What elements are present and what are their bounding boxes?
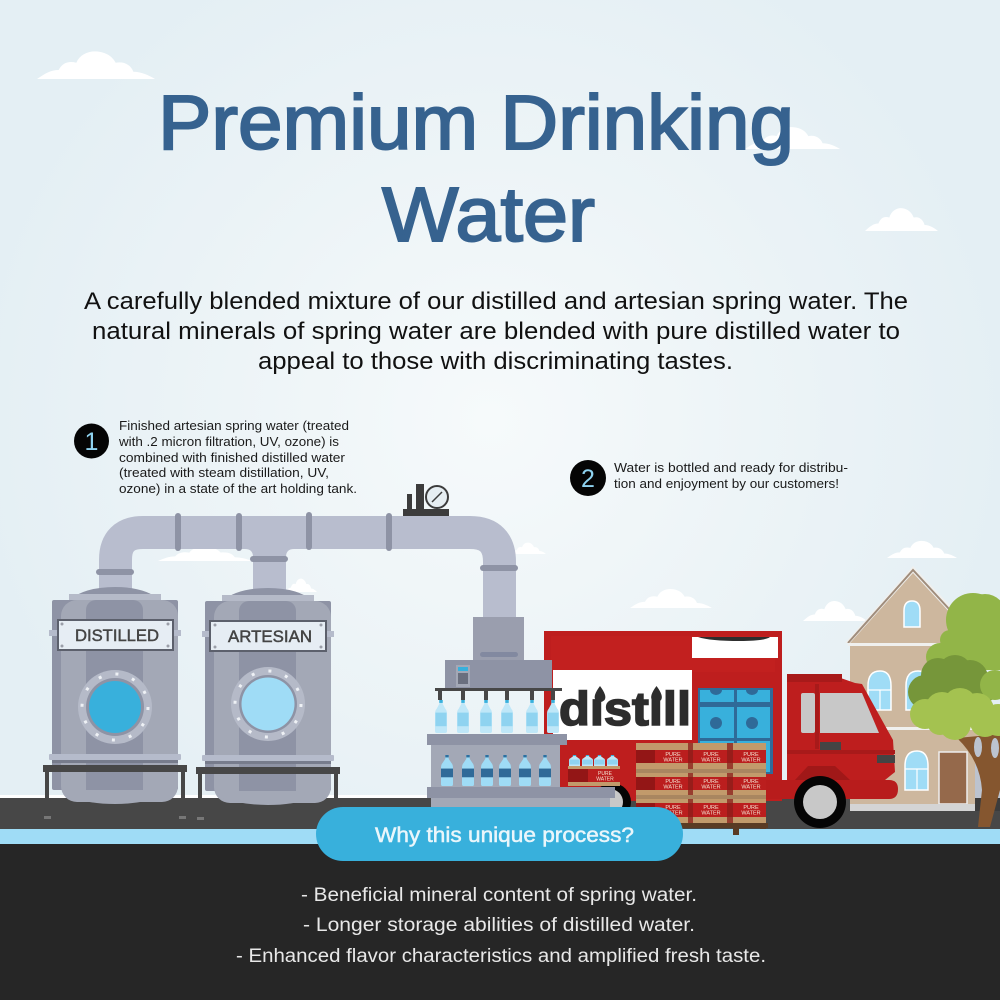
step 1 text: Finished artesian spring water (treated	[119, 419, 349, 433]
porthole	[78, 670, 152, 744]
crate labels: WATER	[701, 784, 721, 790]
window top	[904, 601, 920, 627]
crate labels: WATER	[701, 810, 721, 816]
label: DISTILLED	[75, 626, 159, 645]
button: why this unique process: Why this unique process?	[375, 824, 634, 847]
crate labels: WATER	[741, 810, 761, 816]
clouds	[37, 51, 957, 621]
crate labels: PURE	[665, 805, 681, 811]
step 1 text: combined with finished distilled water	[119, 451, 345, 465]
label: ARTESIAN	[228, 627, 312, 646]
label	[49, 619, 181, 651]
cargo rack of water jugs	[698, 688, 773, 774]
crate labels: PURE	[743, 779, 759, 785]
pressure gauge	[403, 484, 449, 516]
small crate with bottles: WATER	[596, 776, 614, 782]
window lower	[905, 751, 928, 790]
intro text	[84, 288, 908, 375]
step 2 text: tion and enjoyment by our customers!	[614, 477, 839, 491]
house	[845, 566, 1000, 811]
cab windows	[801, 693, 815, 733]
upper white sign	[692, 637, 778, 658]
front wheel	[794, 776, 846, 828]
crate labels: PURE	[743, 805, 759, 811]
step 1 text	[118, 419, 357, 496]
step 1 badge: 1	[85, 428, 98, 456]
tree	[908, 593, 1000, 827]
crate labels: PURE	[703, 779, 719, 785]
crate labels	[663, 752, 761, 816]
step 1 badge	[74, 424, 109, 458]
small crate with bottles: PURE	[598, 771, 613, 777]
crate labels: WATER	[663, 810, 683, 816]
logo: distill: distill	[559, 682, 691, 735]
crate labels: PURE	[703, 752, 719, 758]
control panel	[456, 665, 470, 687]
button: why this unique process	[316, 807, 683, 861]
canopy dark	[908, 655, 1000, 709]
trunk	[957, 734, 1000, 827]
crate labels: WATER	[663, 784, 683, 790]
benefits list: - Longer storage abilities of distilled water.	[303, 915, 695, 936]
step 1 text: (treated with steam distillation, UV,	[119, 466, 329, 480]
upper platform	[427, 734, 567, 745]
pallet legs over water	[733, 828, 739, 835]
step 1 text: with .2 micron filtration, UV, ozone) is	[118, 435, 339, 449]
title: Water	[382, 172, 595, 258]
nozzle bar	[435, 688, 562, 691]
benefits list	[236, 885, 766, 967]
window right	[906, 671, 930, 710]
crate labels: WATER	[701, 758, 721, 764]
door	[939, 752, 967, 804]
bottling machine	[427, 617, 615, 807]
road	[0, 795, 1000, 829]
water stripe	[0, 829, 1000, 844]
walls	[850, 573, 980, 805]
chassis bumper	[766, 780, 898, 799]
intro text: A carefully blended mixture of our distilled and artesian spring water. The	[84, 288, 908, 315]
bottles being filled	[435, 700, 447, 733]
step 2 text: Water is bottled and ready for distribu-	[614, 461, 848, 475]
crate labels: WATER	[663, 758, 683, 764]
tank: artesian	[202, 588, 334, 805]
canopy mid	[926, 593, 1000, 671]
crate labels: PURE	[703, 805, 719, 811]
porthole	[231, 667, 305, 741]
intro text: appeal to those with discriminating tastes.	[258, 348, 733, 375]
tank stands	[43, 765, 340, 798]
benefits list: - Enhanced flavor characteristics and amplified fresh taste.	[236, 946, 766, 967]
title: Premium Drinking	[158, 80, 794, 166]
canopy light	[910, 688, 1000, 740]
crate labels: PURE	[743, 752, 759, 758]
small crate with bottles	[568, 755, 620, 786]
pipe clamps	[96, 512, 518, 575]
main pipe	[116, 532, 500, 620]
cargo box	[544, 631, 782, 801]
crate labels: PURE	[665, 752, 681, 758]
crate labels: PURE	[665, 779, 681, 785]
tank: distilled	[49, 587, 181, 804]
hopper	[473, 617, 524, 660]
white logo banner	[553, 670, 692, 740]
pallet of crates	[636, 743, 768, 835]
benefits list: - Beneficial mineral content of spring water.	[301, 885, 697, 906]
step 2 badge: 2	[581, 465, 595, 493]
cab	[787, 674, 895, 780]
pipes	[96, 512, 518, 620]
step 2 badge	[570, 460, 606, 496]
intro text: natural minerals of spring water are blended with pure distilled water to	[92, 318, 900, 345]
crate labels: WATER	[741, 784, 761, 790]
roof	[845, 566, 990, 648]
dark footer panel	[0, 844, 1000, 1000]
crate labels: WATER	[741, 758, 761, 764]
truck	[544, 631, 898, 828]
lower platform	[427, 787, 615, 798]
labelled bottles	[441, 755, 453, 786]
label	[202, 620, 334, 652]
step 1 text: ozone) in a state of the art holding tank.	[119, 482, 357, 496]
title	[158, 80, 794, 258]
filler head	[445, 660, 552, 688]
rear wheel	[593, 783, 631, 821]
step 2 text	[614, 461, 848, 491]
clipped logo	[698, 637, 770, 641]
window left	[868, 671, 891, 710]
